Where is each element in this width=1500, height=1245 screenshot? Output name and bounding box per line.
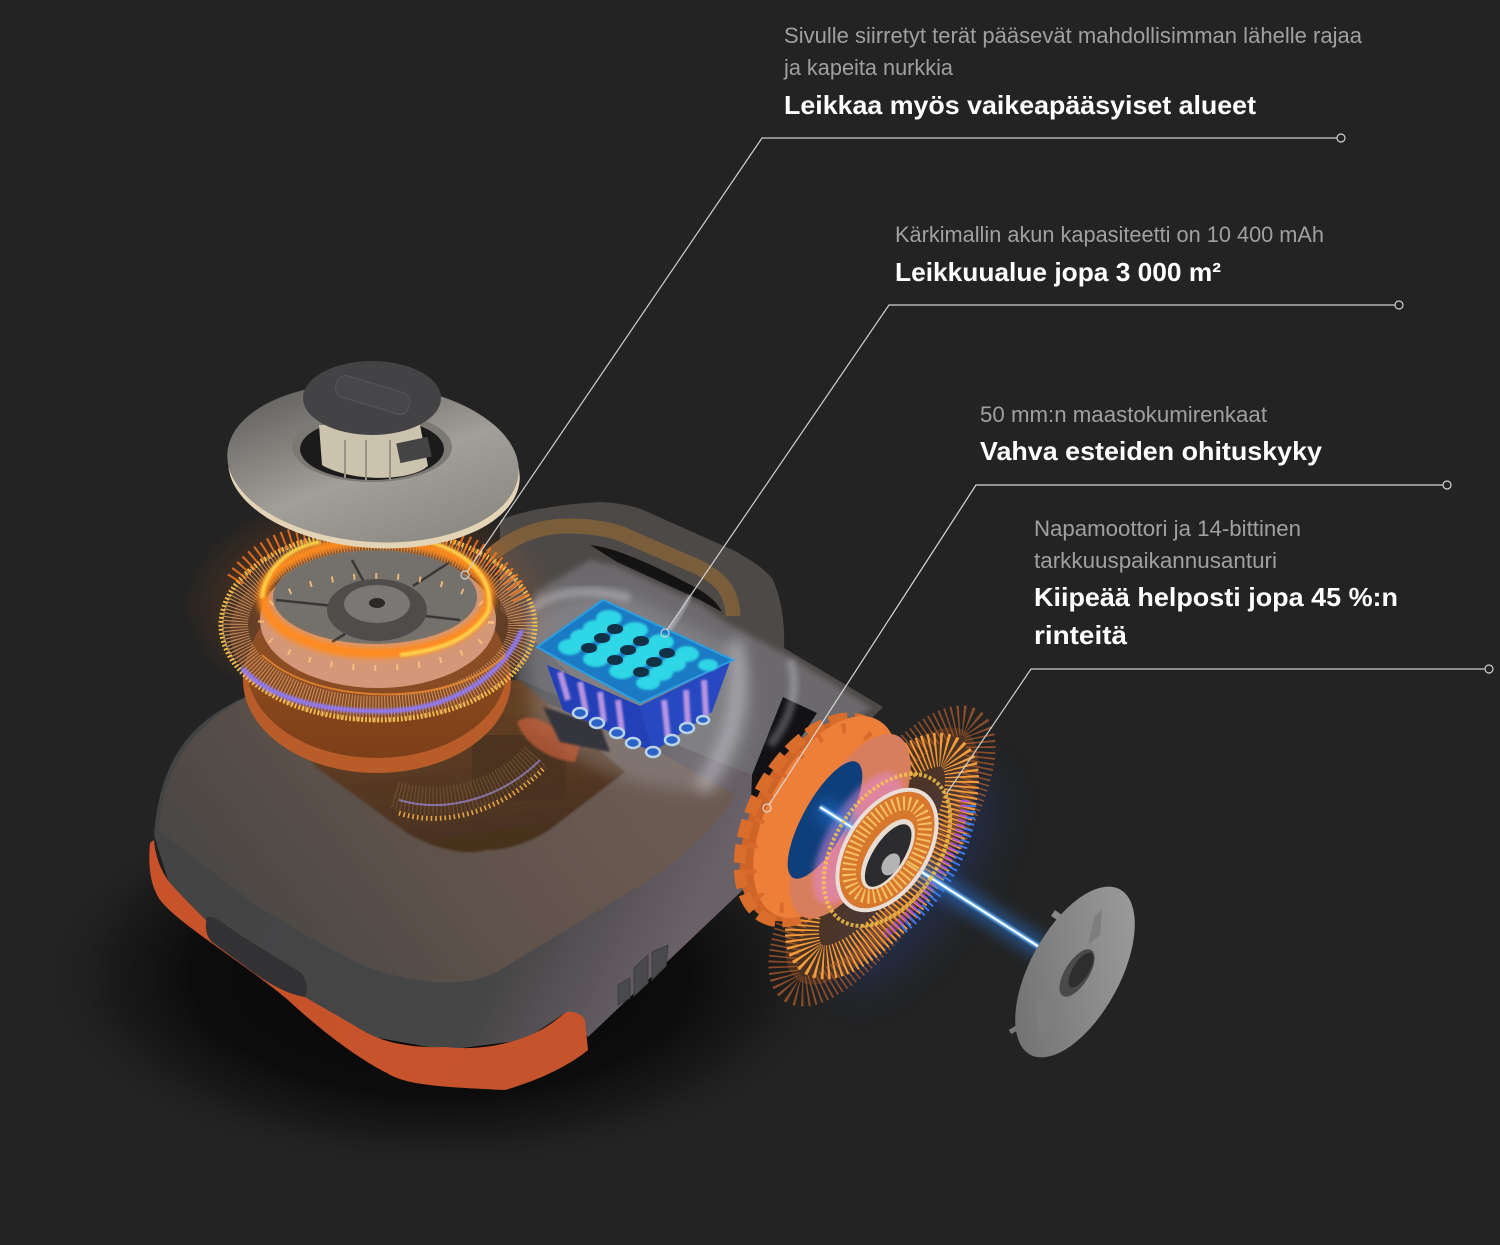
cap emblem	[333, 373, 412, 417]
orange bumper	[149, 840, 588, 1090]
body top surface	[158, 690, 735, 982]
callout 1 text: ja kapeita nurkkia	[783, 55, 954, 80]
handle opening	[590, 545, 722, 612]
center hub	[327, 579, 427, 641]
glass cylinder	[230, 543, 526, 721]
right side	[640, 662, 730, 752]
callout 4 leader line	[947, 665, 1493, 793]
motor hub	[798, 751, 976, 949]
cell ends	[573, 708, 709, 757]
reflected dotted arc	[395, 755, 545, 818]
lid opening	[292, 412, 452, 482]
orange halo	[182, 490, 562, 720]
wheel opening	[774, 752, 876, 888]
dark electronics under battery	[543, 707, 610, 752]
callout 4 text: Kiipeää helposti jopa 45 %:n	[1034, 582, 1398, 612]
wheel assembly	[709, 691, 1159, 1076]
pink glass band	[260, 552, 496, 688]
callout 1: blade reach	[461, 23, 1363, 579]
callout 4: hub motor	[947, 516, 1493, 793]
blade cover lid	[222, 361, 525, 558]
callout 3 text: 50 mm:n maastokumirenkaat	[980, 402, 1267, 427]
callout 2 text: Kärkimallin akun kapasiteetti on 10 400 mAh	[895, 222, 1324, 247]
tinted window recess	[250, 680, 625, 852]
callout 4 text: tarkkuuspaikannusanturi	[1034, 548, 1277, 573]
blue glow	[801, 744, 1029, 1016]
battery top plate	[537, 600, 733, 703]
callout 1 text: Sivulle siirretyt terät pääsevät mahdollisimman lähelle rajaa	[784, 23, 1363, 48]
callout 2 text: Leikkuualue jopa 3 000 m²	[895, 257, 1221, 287]
callout 1 leader line	[461, 134, 1345, 579]
pink rays on inner wall	[795, 759, 921, 917]
tire inner wall	[765, 716, 935, 936]
callout 2 text	[895, 222, 1324, 287]
tire	[723, 693, 929, 941]
motor connector	[396, 437, 432, 463]
warning labels	[618, 945, 668, 1005]
orange part under battery	[517, 718, 580, 762]
smoky chassis haze	[530, 591, 794, 791]
motor column	[319, 425, 428, 478]
lower orange dots	[261, 576, 491, 668]
left side	[547, 665, 653, 752]
circular blade well	[243, 578, 511, 773]
blade arms	[276, 560, 460, 642]
body skirt	[154, 680, 752, 1050]
robot mower illustration	[40, 361, 1159, 1170]
blade disc	[273, 550, 477, 644]
dark cap	[303, 361, 441, 435]
battery pack	[537, 600, 733, 757]
callout 3: tires	[763, 402, 1451, 812]
dark recess in window	[472, 735, 566, 801]
magenta and blue side rays	[885, 800, 965, 935]
callout 3 text	[980, 402, 1323, 466]
tire tread outer	[709, 694, 921, 946]
handle inner band	[490, 526, 733, 616]
dark gap behind wheel	[742, 697, 817, 830]
tire tread blocks	[725, 708, 905, 928]
outer dotted gold ring	[221, 530, 535, 720]
ground shadow	[40, 780, 840, 1170]
callout 2: battery	[661, 222, 1403, 637]
light beam	[820, 807, 1047, 952]
hub cover plate	[991, 868, 1159, 1076]
callout 3 leader line	[763, 481, 1451, 812]
glowing cells	[558, 610, 718, 690]
callout 4 text	[1034, 516, 1398, 650]
translucent handle and rear housing	[490, 502, 883, 830]
callout 4 text: Napamoottori ja 14-bittinen	[1034, 516, 1301, 541]
glass chassis	[515, 560, 872, 785]
callout 1 text: Leikkaa myös vaikeapääsyiset alueet	[784, 90, 1256, 120]
blade disc and light rings	[182, 490, 562, 721]
callout 3 text: Vahva esteiden ohituskyky	[980, 436, 1323, 466]
front slot	[206, 917, 307, 997]
motor field rays	[744, 691, 1020, 1021]
purple arc	[242, 630, 522, 711]
callout 4 text: rinteitä	[1034, 620, 1128, 650]
orange band	[262, 655, 505, 694]
orange glow ring	[263, 541, 489, 653]
cell holes	[581, 624, 675, 677]
cell columns	[560, 672, 706, 738]
callout 2 leader line	[661, 301, 1403, 637]
callout 1 text	[783, 23, 1363, 120]
outer tick ring	[235, 541, 521, 709]
upper orange rays	[235, 535, 522, 600]
